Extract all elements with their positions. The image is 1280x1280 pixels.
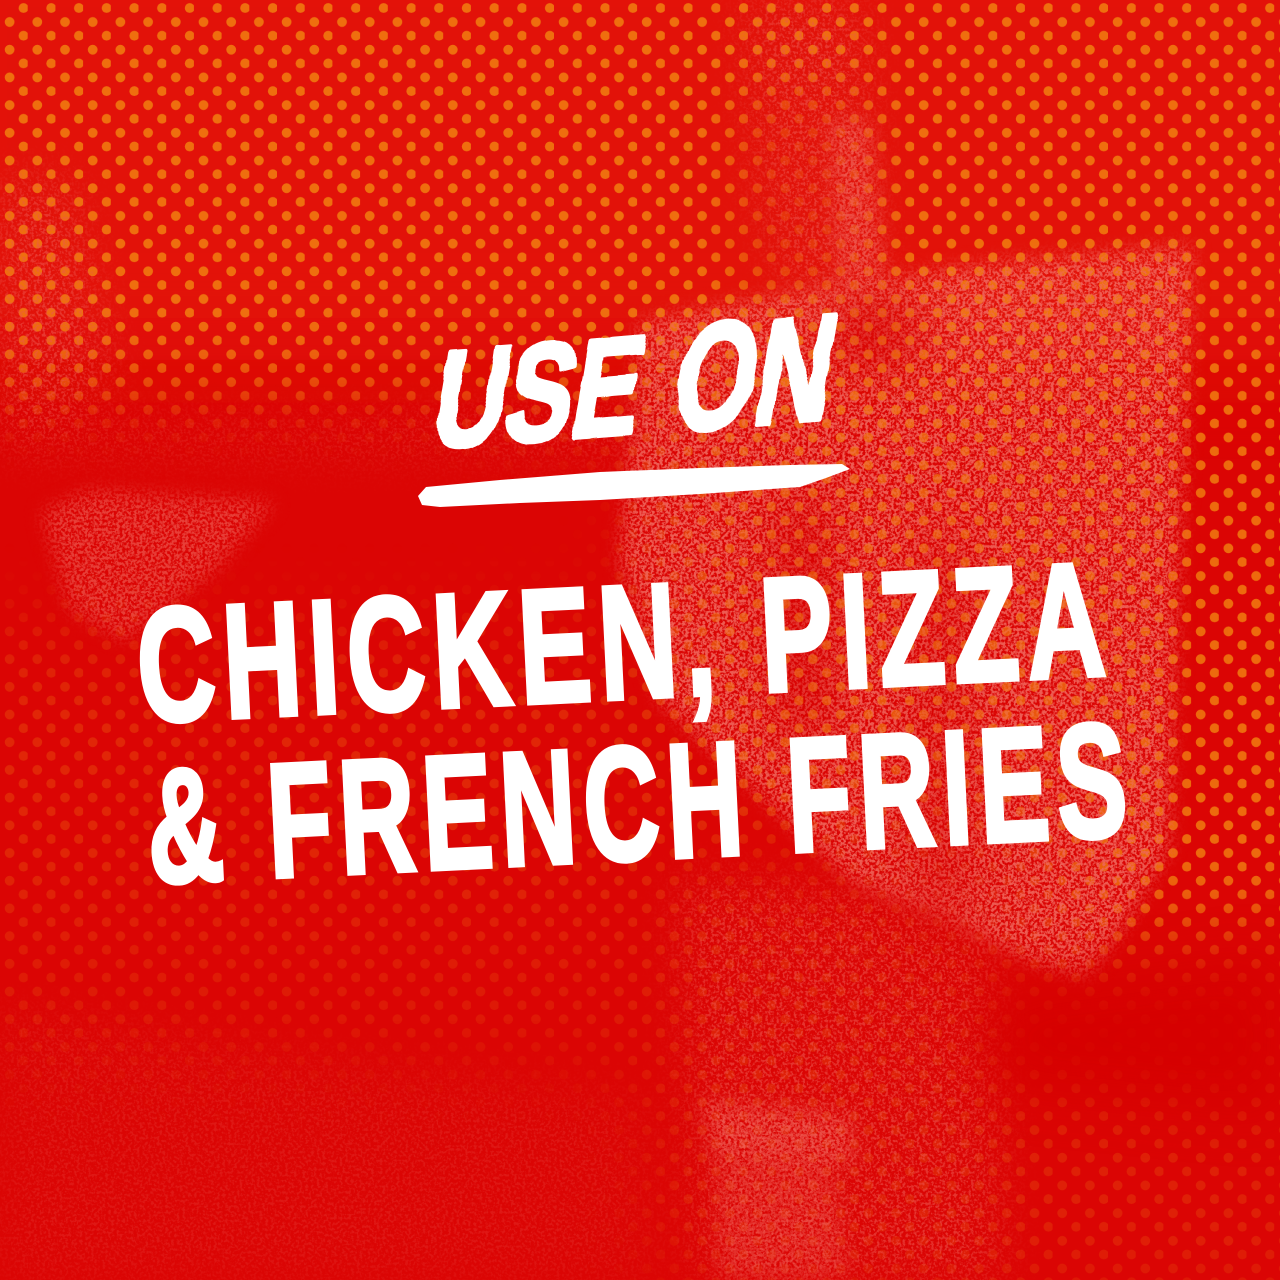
word: USE: USE: [423, 306, 656, 479]
headline: chicken, pizza & french fries: [133, 528, 1139, 918]
brush underline: [418, 464, 850, 507]
heading: use on: [423, 282, 848, 479]
dark stains on the packet: [785, 305, 1280, 1110]
faded speckle: strips and lower column: [0, 0, 1000, 1280]
word: ON: ON: [662, 282, 848, 465]
brighter red wash at top: [0, 0, 1280, 360]
dots showing through the packet: [670, 260, 1178, 854]
